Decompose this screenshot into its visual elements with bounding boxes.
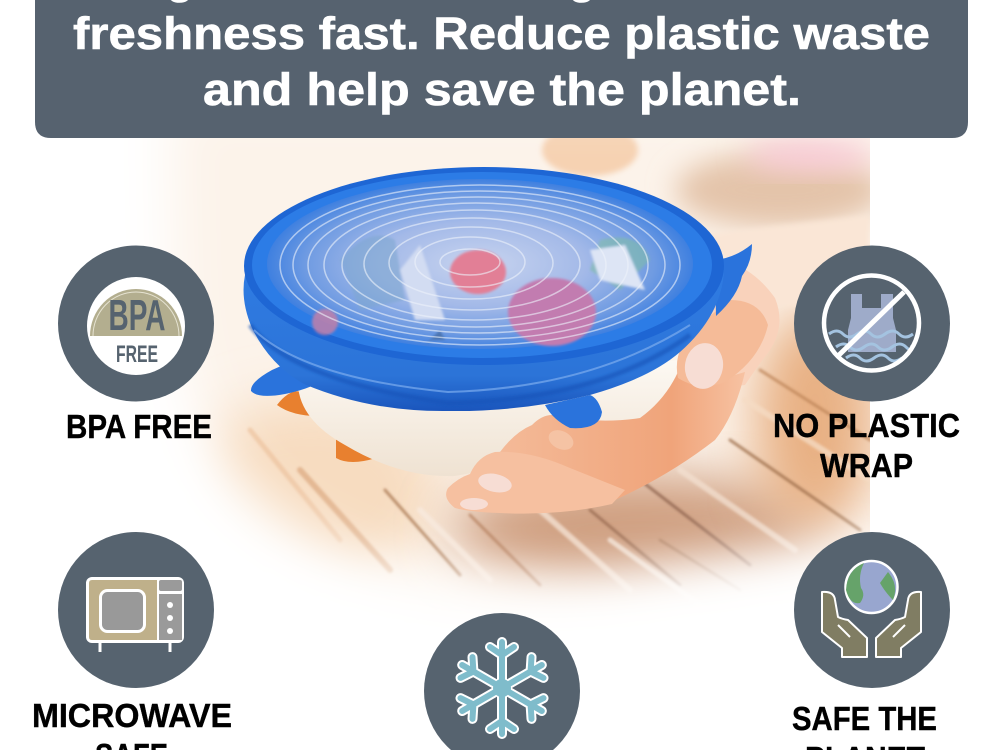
- icon: hands holding globe: [822, 561, 921, 657]
- headline banner: [35, 0, 968, 138]
- fingernails: [460, 340, 727, 510]
- hand: lower fingers: [446, 452, 625, 514]
- banner text: [73, 0, 930, 115]
- label: BPA FREE: [66, 408, 212, 445]
- banner text: and help save the planet.: [203, 64, 801, 115]
- hand: palm: [500, 372, 745, 503]
- badge: BPA free: [58, 246, 214, 445]
- label: SAFE THE: [792, 700, 937, 737]
- photo background: blurred wooden table: [166, 138, 870, 604]
- badge: save the planet: [792, 532, 950, 750]
- wood grain streaks: [250, 370, 870, 605]
- photo: hands holding bowl with blue silicone lid on wooden table: [166, 138, 870, 604]
- concentric rings on lid: [280, 185, 680, 345]
- hand: back of the hand behind the lid: [690, 262, 779, 390]
- hand: thumb: [677, 300, 768, 386]
- badge: no plastic wrap: [773, 246, 960, 484]
- icon: crossed-out plastic bag in water: [824, 276, 919, 370]
- icon: BPA free seal: [87, 277, 185, 375]
- icon: BPA free seal: BPA: [108, 291, 166, 340]
- icon: microwave: [86, 577, 184, 652]
- label: NO PLASTIC: [773, 407, 960, 444]
- banner text: freshness fast. Reduce plastic waste: [73, 8, 930, 59]
- icon: BPA free seal: FREE: [116, 341, 158, 368]
- icon: snowflake: [456, 642, 548, 734]
- badge: freezer safe: [424, 613, 580, 750]
- label: MICROWAVE: [32, 697, 232, 734]
- label: [773, 407, 960, 484]
- label: [792, 700, 937, 750]
- label: [32, 697, 232, 750]
- bowl: [298, 360, 680, 476]
- lower left fingers: [277, 391, 376, 462]
- lid tabs: [251, 244, 752, 428]
- food under lid: [312, 236, 650, 346]
- badge: microwave safe: [32, 532, 232, 750]
- lid: silicone stretch lid: [244, 167, 752, 428]
- label: WRAP: [820, 447, 913, 484]
